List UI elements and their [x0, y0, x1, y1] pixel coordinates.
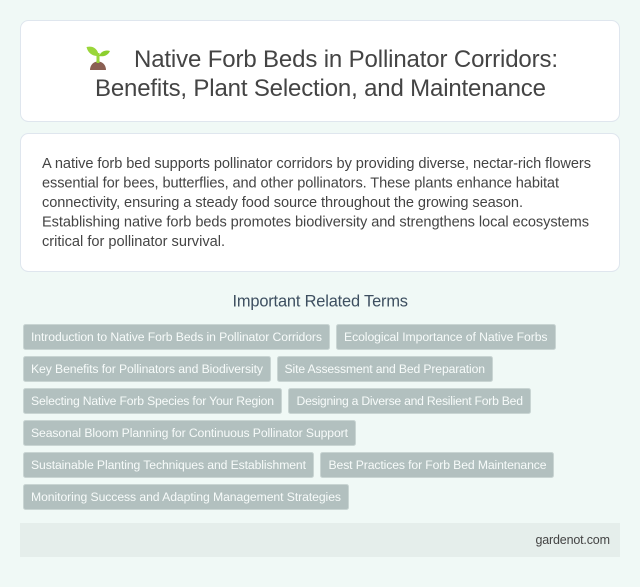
heading: important related terms: Important Related Terms — [232, 292, 408, 310]
icon: seedling — [86, 47, 110, 70]
chip: designing bed — [288, 388, 530, 414]
chip: seasonal bloom: Seasonal Bloom Planning for Continuous Pollinator Support — [31, 426, 349, 440]
chip: sustainable planting — [24, 452, 314, 478]
panel: introduction text: essential for bees, butterflies, and other pollinators. These plants enhance habitat — [42, 176, 559, 192]
panel: introduction text: critical for pollinator survival. — [42, 234, 225, 250]
chip: designing bed: Designing a Diverse and Resilient Forb Bed — [296, 394, 523, 408]
chip: introduction — [24, 324, 330, 350]
chip: selecting species — [24, 388, 282, 414]
footer — [20, 523, 620, 557]
term chips — [24, 324, 556, 510]
chip: monitoring: Monitoring Success and Adapting Management Strategies — [31, 490, 341, 504]
panel: introduction text: connectivity, ensuring a steady food source throughout the growing season. — [42, 195, 523, 211]
chip: ecological importance — [336, 324, 556, 350]
chip: key benefits: Key Benefits for Pollinators and Biodiversity — [31, 362, 264, 376]
panel: introduction text — [20, 134, 620, 272]
panel: introduction text: A native forb bed supports pollinator corridors by providing diverse, nectar-rich flowers — [42, 156, 591, 172]
footer: gardenot.com — [536, 533, 610, 547]
chip: key benefits — [24, 356, 270, 382]
chip: selecting species: Selecting Native Forb Species for Your Region — [31, 394, 274, 408]
chip: sustainable planting: Sustainable Planting Techniques and Establishment — [31, 458, 307, 472]
title: Native Forb Beds in Pollinator Corridors: — [134, 46, 558, 73]
panel: introduction text: Establishing native forb beds promotes biodiversity and strengthens local ecosystems — [42, 214, 589, 230]
chip: introduction: Introduction to Native Forb Beds in Pollinator Corridors — [31, 330, 322, 344]
title: Benefits, Plant Selection, and Maintenance — [95, 75, 546, 102]
chip: seasonal bloom — [24, 420, 356, 446]
chip: site assessment — [278, 356, 492, 382]
chip: site assessment: Site Assessment and Bed Preparation — [284, 362, 485, 376]
panel: title header — [20, 20, 620, 122]
chip: best practices — [320, 452, 554, 478]
chip: best practices: Best Practices for Forb Bed Maintenance — [328, 458, 547, 472]
chip: monitoring — [24, 484, 348, 510]
chip: ecological importance: Ecological Importance of Native Forbs — [344, 330, 548, 344]
